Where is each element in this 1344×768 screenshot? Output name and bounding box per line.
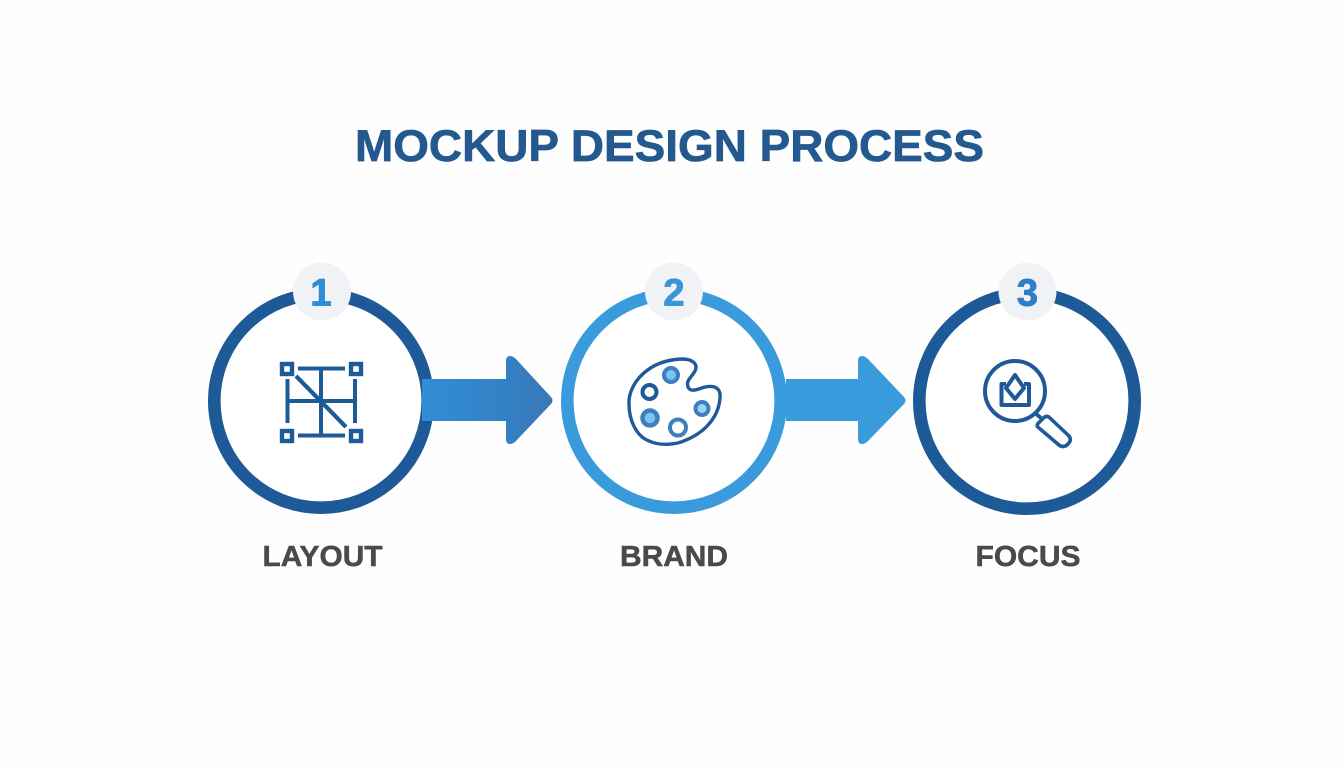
title: MOCKUP DESIGN PROCESS bbox=[355, 122, 984, 171]
badge 1: 1 bbox=[310, 272, 332, 314]
step 2: brand bbox=[567, 262, 906, 573]
label: layout: LAYOUT bbox=[262, 541, 383, 573]
badge 3: 3 bbox=[1017, 272, 1038, 314]
ring 2 bbox=[567, 294, 781, 508]
label: brand: BRAND bbox=[620, 541, 728, 573]
icon: palette bbox=[629, 359, 720, 444]
arrow 2 bbox=[786, 356, 906, 444]
arrow 1 bbox=[422, 356, 552, 444]
icon: layout grid bbox=[282, 364, 361, 441]
icon: magnifier with crown bbox=[985, 361, 1070, 446]
step 3: focus bbox=[919, 262, 1135, 573]
step 1: layout bbox=[214, 262, 553, 573]
badge 3 bbox=[998, 262, 1056, 320]
ring 1 bbox=[214, 294, 428, 508]
badge 1 bbox=[293, 262, 351, 320]
ring 3 bbox=[919, 293, 1135, 509]
label: focus: FOCUS bbox=[976, 541, 1080, 573]
badge 2 bbox=[645, 262, 703, 320]
badge 2: 2 bbox=[663, 272, 685, 314]
